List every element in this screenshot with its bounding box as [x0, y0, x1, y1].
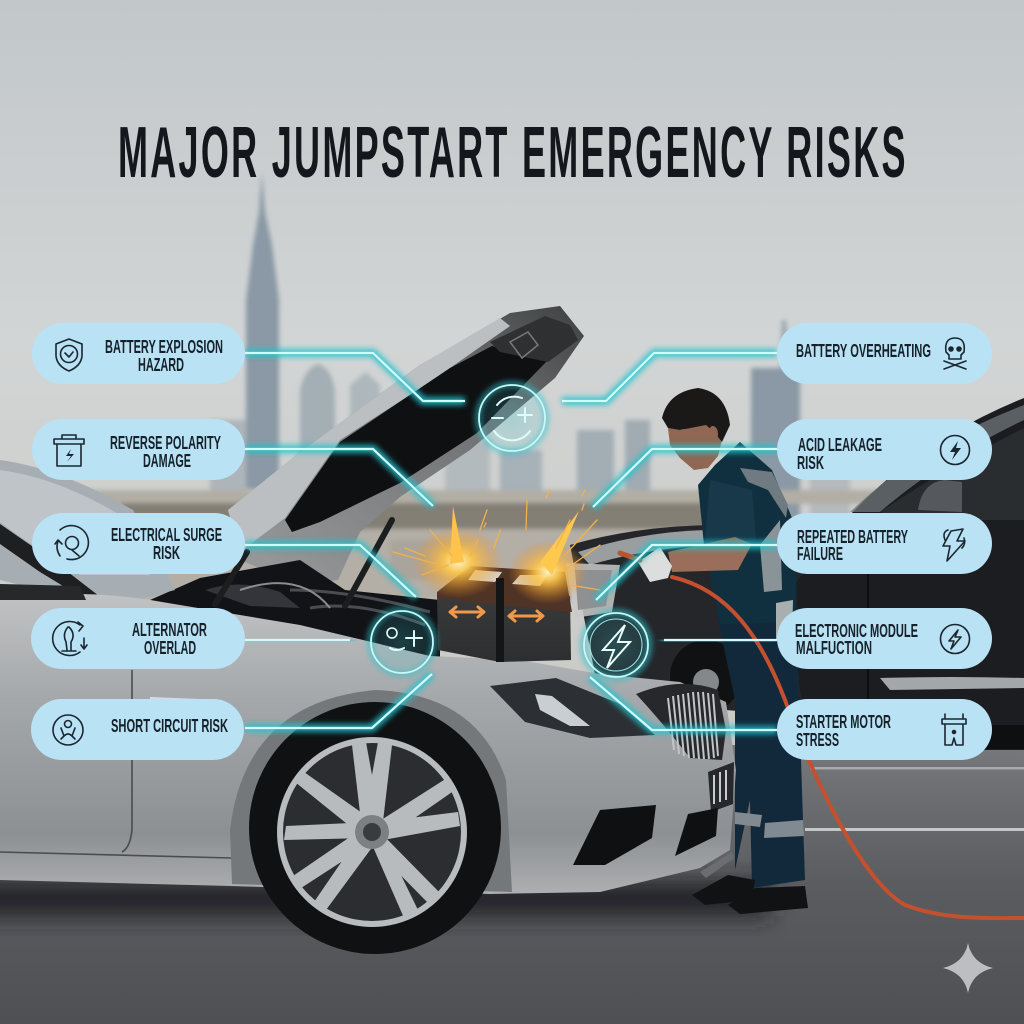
label text: ACID LEAKAGE: [798, 435, 882, 455]
silver car body: [0, 460, 736, 954]
asphalt ground: [0, 745, 1024, 1024]
licence plate: [708, 762, 734, 812]
connector: starter motor stress: [590, 677, 777, 730]
connector lines left: [245, 353, 465, 728]
label text: SHORT CIRCUIT RISK: [111, 716, 228, 736]
pill: acid leakage risk: [777, 419, 992, 480]
pill: starter motor stress: [777, 699, 992, 760]
icon: double bolt: [943, 529, 965, 561]
grille: [636, 684, 726, 760]
open hood: [228, 306, 584, 585]
icon: short circuit figure: [53, 715, 83, 745]
icon: bolt in circle: [940, 624, 970, 654]
label text: [132, 620, 207, 658]
connector: reverse polarity damage: [245, 449, 433, 506]
label text: HAZARD: [138, 355, 184, 375]
alloy rim: [277, 737, 467, 927]
mirror: [0, 584, 86, 600]
label text: REPEATED BATTERY: [797, 527, 908, 547]
label text: BATTERY OVERHEATING: [796, 341, 931, 361]
label text: [796, 712, 891, 750]
pill: electronic module malfunction: [777, 608, 992, 669]
sky background: [0, 0, 1024, 760]
dark car behind worker: [566, 525, 850, 720]
black SUV on the right: [790, 398, 1024, 750]
city skyline: [210, 172, 850, 528]
connector: battery explosion hazard: [245, 353, 465, 401]
connector: battery overheating: [562, 353, 777, 401]
hood inner dark panel: [285, 346, 548, 532]
label text: BATTERY EXPLOSION: [105, 337, 223, 357]
sparks from battery terminals: [393, 490, 600, 604]
label text: [797, 435, 882, 473]
label text: STRESS: [796, 730, 839, 750]
connector lines right: [562, 353, 777, 730]
watermark star: [943, 943, 993, 993]
hazy horizon and bridge: [0, 490, 1024, 601]
hud circle: lightning: [583, 612, 649, 678]
pill: reverse polarity damage: [32, 419, 245, 480]
label text: RISK: [153, 543, 180, 563]
icon: surge cycle: [55, 526, 88, 560]
pill: repeated battery failure: [777, 513, 992, 574]
pill: battery overheating: [777, 323, 992, 384]
label text: [111, 525, 222, 563]
label text: [797, 527, 908, 564]
bumper vents: [573, 805, 718, 865]
icon: alternator: [53, 621, 87, 656]
connector: electronic module malfunction: [664, 640, 777, 641]
label text: ELECTRICAL SURGE: [111, 525, 222, 545]
title: MAJOR JUMPSTART EMERGENCY RISKS: [118, 112, 906, 193]
icon: skull and crossbones: [944, 338, 966, 369]
pill: electrical surge risk: [32, 513, 245, 574]
label text: [105, 337, 223, 375]
worker: [638, 388, 808, 914]
pill: battery explosion hazard: [32, 323, 245, 384]
headlight: [490, 678, 655, 738]
pill: short circuit risk: [31, 699, 244, 760]
label text: DAMAGE: [143, 451, 191, 471]
label text: STARTER MOTOR: [796, 712, 891, 732]
battery arrows: [450, 607, 543, 621]
worker boots: [692, 875, 808, 914]
icon: bolt in cycle circle: [940, 436, 970, 464]
label text: RISK: [797, 453, 824, 473]
connector: electrical surge risk: [245, 545, 416, 597]
connector: repeated battery failure: [596, 545, 777, 600]
hud circle: polarity top: [478, 384, 546, 452]
connector: acid leakage risk: [593, 449, 777, 507]
tyre: [249, 702, 501, 954]
label text: [110, 433, 221, 471]
label text: ALTERNATOR: [132, 620, 207, 640]
connector: short circuit risk: [245, 674, 432, 728]
pill: alternator overload: [31, 608, 245, 669]
door seams: [0, 670, 232, 858]
worker torso: [698, 442, 797, 624]
orange jumper cable: [620, 553, 1024, 918]
twin batteries: [437, 566, 572, 662]
engine bay: [150, 520, 440, 660]
icon: battery with bolt: [54, 435, 84, 466]
label text: [795, 621, 918, 658]
car windshield and side glass: [0, 460, 175, 607]
label text: OVERLAD: [144, 638, 196, 658]
icon: shield: [56, 339, 82, 371]
label text: MALFUCTION: [796, 638, 872, 658]
hud circle: alternator: [370, 610, 434, 674]
connector: alternator overload: [245, 640, 350, 641]
wheel arch: [230, 690, 512, 892]
icon: starter motor: [942, 714, 966, 745]
worker arm and glove: [705, 480, 756, 548]
label text: REVERSE POLARITY: [110, 433, 221, 453]
label text: FAILURE: [797, 544, 843, 564]
car main body shell: [0, 594, 736, 894]
hood outer skin: [228, 306, 584, 585]
worker legs: [717, 610, 805, 888]
hood silver edge: [228, 318, 510, 552]
label text: ELECTRONIC MODULE: [795, 621, 918, 641]
worker head: [668, 420, 722, 470]
